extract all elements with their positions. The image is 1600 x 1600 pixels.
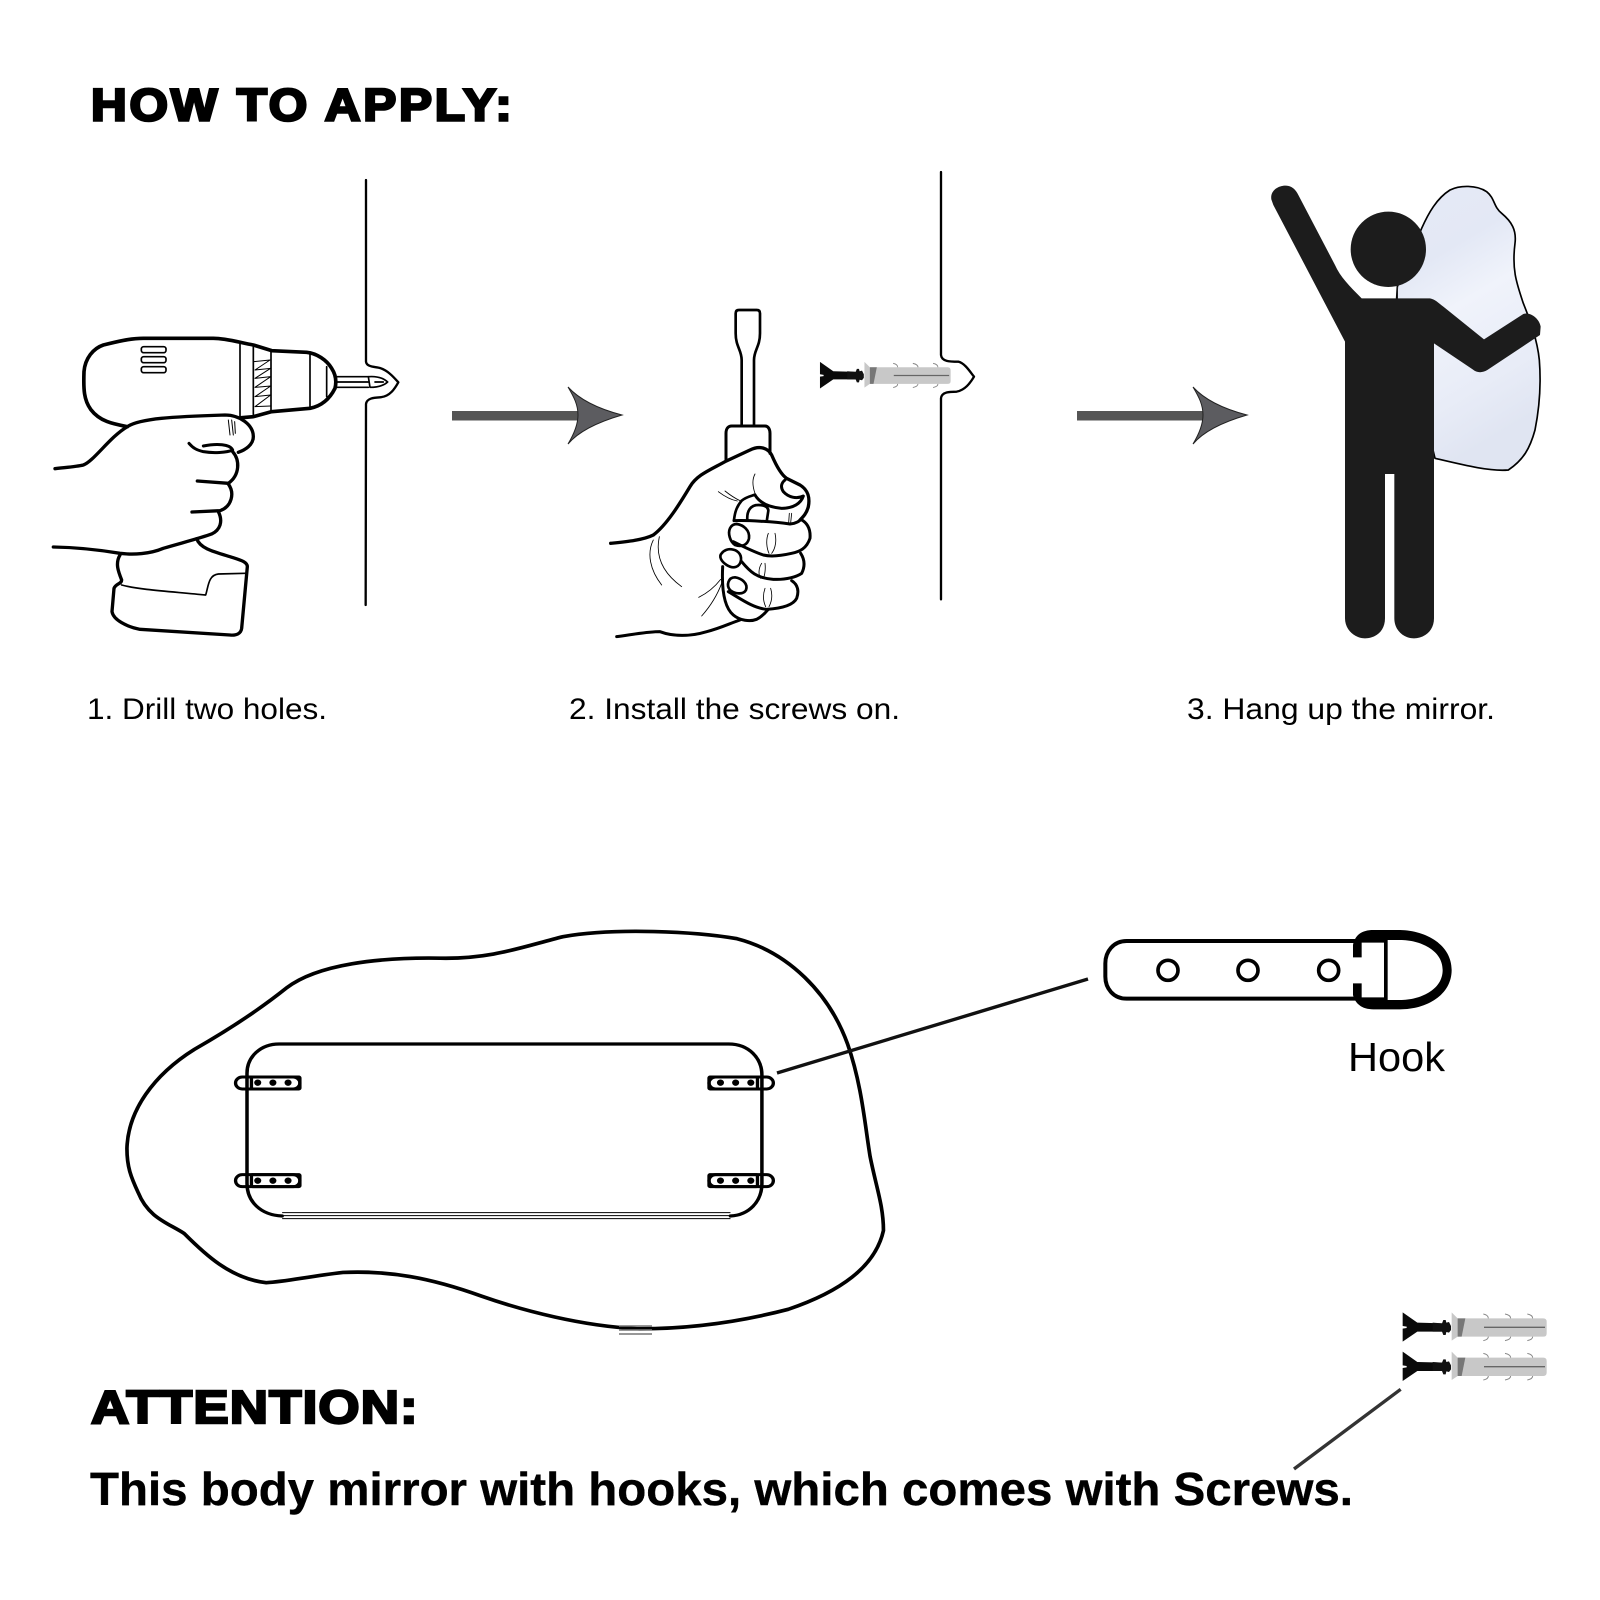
arrow 1	[452, 387, 622, 444]
icon: hook top left	[236, 1077, 300, 1089]
icon: person silhouette	[1271, 186, 1541, 638]
icon: screw and wall plug bottom	[1403, 1352, 1547, 1381]
icon: rounded panel	[247, 1044, 762, 1216]
icon: mirror	[1397, 186, 1540, 470]
icon: drill body	[84, 338, 388, 427]
icon: hook top right	[709, 1077, 773, 1089]
icon: wall with drilled bump	[366, 180, 398, 605]
attention body text: This body mirror with hooks, which comes with Screws.	[90, 1463, 1353, 1515]
arrow 2	[1077, 387, 1247, 444]
back panel with four hooks	[236, 1044, 773, 1219]
icon: wall with drilled bump	[941, 172, 974, 599]
icon: screw and wall plug	[820, 362, 951, 388]
icon: screwdriver	[726, 310, 770, 460]
caption step 3: 3. Hang up the mirror.	[1187, 693, 1495, 726]
icon: hook bottom left	[236, 1175, 300, 1187]
caption step 1: 1. Drill two holes.	[87, 693, 327, 726]
step 3 illustration: person hanging mirror	[1271, 186, 1541, 638]
icon: drill battery	[112, 539, 247, 635]
screws set	[1294, 1312, 1547, 1469]
mirror back outline	[127, 931, 883, 1329]
caption step 2: 2. Install the screws on.	[569, 693, 900, 726]
icon: hook bottom right	[709, 1175, 773, 1187]
hook detail	[1105, 930, 1452, 1009]
icon: hand gripping drill	[53, 415, 253, 554]
label: hook: Hook	[1348, 1034, 1446, 1080]
title: how to apply: HOW TO APPLY:	[91, 81, 514, 131]
icon: fist holding screwdriver	[611, 448, 810, 637]
double line bottom edge	[282, 1213, 730, 1219]
heading: attention: ATTENTION:	[91, 1381, 419, 1433]
leader line to hook detail	[777, 979, 1088, 1073]
leader line to screws	[1294, 1389, 1401, 1469]
step 2 illustration: hand with screwdriver, screw, wall	[611, 172, 974, 637]
mirror bottom seam mark	[619, 1326, 652, 1334]
step 1 illustration: hand drilling wall	[53, 180, 398, 635]
icon: screw and wall plug top	[1403, 1312, 1547, 1342]
